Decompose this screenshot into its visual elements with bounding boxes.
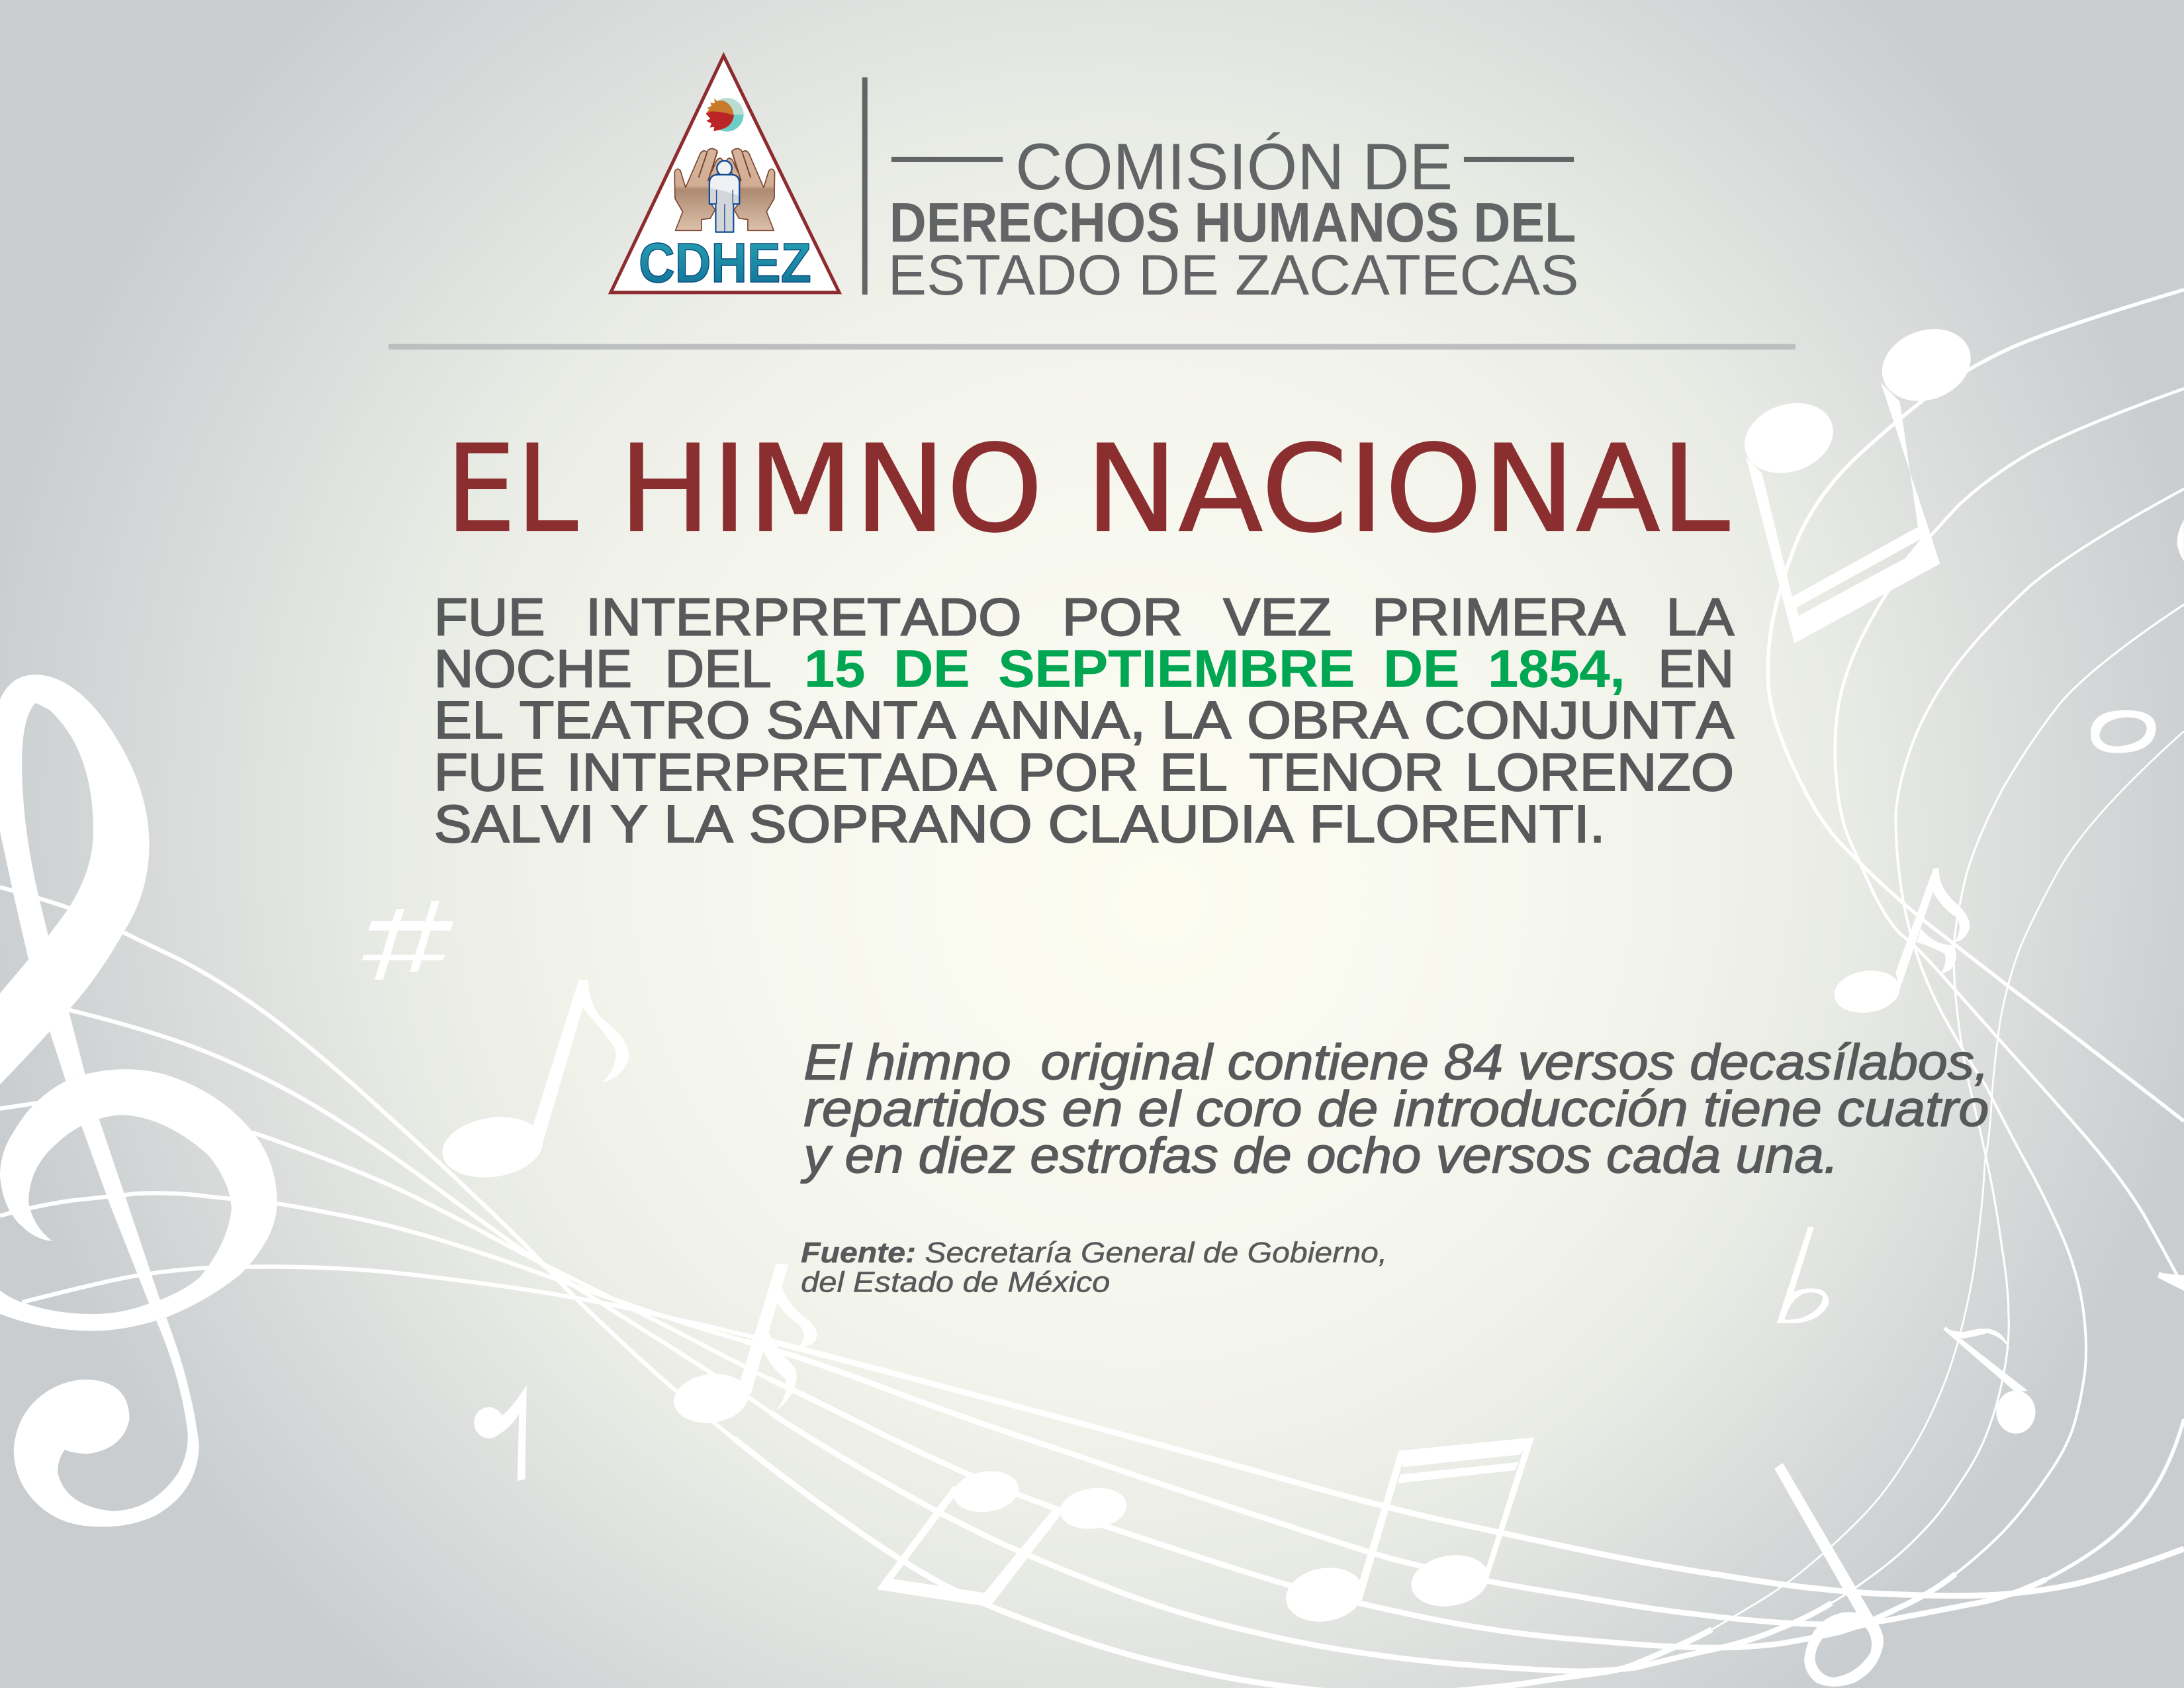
heading: institution name: ESTADO DE ZACATECAS	[888, 244, 1579, 307]
title: NACIONAL	[1085, 419, 1730, 559]
heading: institution name: DERECHOS HUMANOS DEL	[889, 191, 1576, 254]
icon: sun	[706, 98, 744, 132]
icon: sharp sign	[362, 901, 453, 980]
vertical divider	[862, 77, 868, 295]
source note	[801, 1237, 1387, 1298]
text block: main paragraph: NOCHE DEL 15 DE SEPTIEMBRE DE 1854, EN	[434, 639, 1734, 698]
icon: beamed notes upper right	[1740, 320, 1975, 643]
title: HIMNO	[618, 419, 1043, 559]
text block: main paragraph: SALVI Y LA SOPRANO CLAUDIA FLORENTI.	[434, 794, 1606, 853]
icon: double flag note right	[1833, 868, 1970, 1016]
text block: main paragraph: FUE INTERPRETADA POR EL TENOR LORENZO	[434, 743, 1734, 802]
horizontal rule	[388, 344, 1796, 350]
title: EL	[445, 419, 578, 559]
icon: double flag note on the staff	[672, 1264, 817, 1427]
icon: flat sign	[1777, 1227, 1829, 1323]
icon: falling eighth note right	[1943, 1327, 2035, 1434]
icon: whole note	[2091, 520, 2184, 753]
text block: verse note: y en diez estrofas de ocho versos cada una.	[800, 1128, 1839, 1184]
text block: verse note: El himno original contiene 84 versos decasílabos,	[803, 1035, 1989, 1091]
heading: institution name: COMISIÓN DE	[1015, 130, 1453, 203]
icon: hollow note bottom right	[1774, 1463, 1884, 1687]
icon: beamed sixteenth notes bottom	[1281, 1437, 1534, 1628]
logo: CDHEZ triangle	[611, 56, 839, 294]
source note: del Estado de México	[801, 1266, 1110, 1298]
heading: institution name	[888, 130, 1579, 307]
logo wordmark: CDHEZ	[639, 232, 811, 294]
text block: main paragraph	[434, 587, 1734, 853]
text block: verse note	[800, 1035, 1989, 1184]
icon: treble clef	[0, 675, 277, 1527]
text block: verse note: repartidos en el coro de introducción tiene cuatro	[803, 1081, 1989, 1137]
icon: beamed notes bottom left	[876, 1467, 1129, 1606]
icon: hands and person	[674, 148, 775, 232]
icon: small eighth note	[474, 1385, 527, 1481]
source note: Fuente: Secretaría General de Gobierno,	[801, 1237, 1387, 1269]
icon: large eighth note	[440, 980, 629, 1184]
icon: note flag at right edge	[2158, 1272, 2184, 1291]
text block: main paragraph: FUE INTERPRETADO POR VEZ PRIMERA LA	[434, 587, 1734, 646]
text block: main paragraph: EL TEATRO SANTA ANNA, LA OBRA CONJUNTA	[434, 690, 1734, 749]
